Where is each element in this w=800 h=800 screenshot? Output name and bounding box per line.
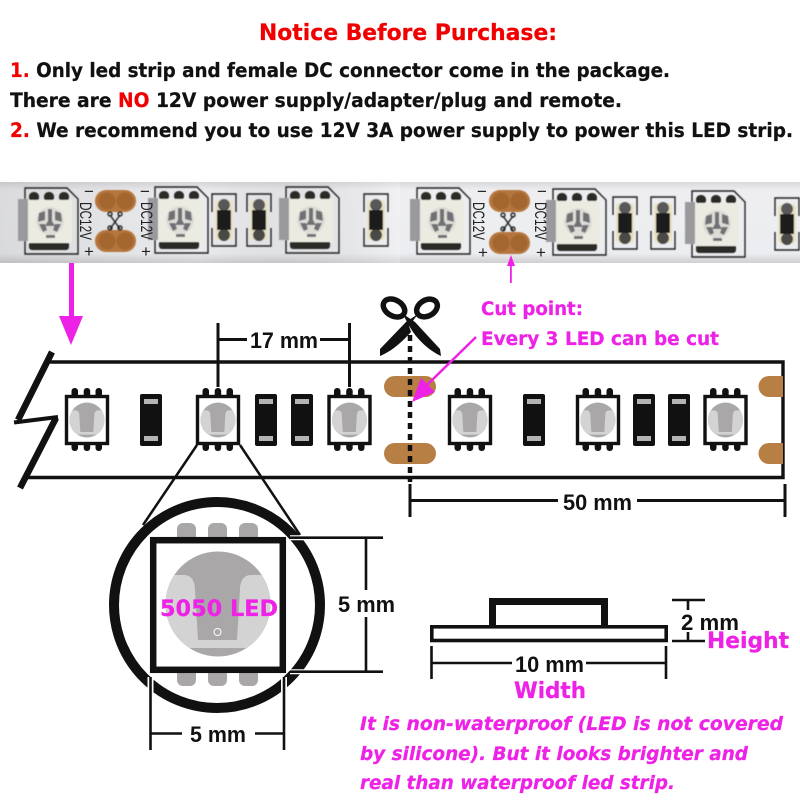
- photo silkscreen labels: DC12V: [76, 202, 95, 240]
- photo resistor 3: [364, 194, 388, 246]
- width label: Width: [514, 678, 586, 704]
- photo cut mark 2: [501, 213, 515, 231]
- funnel lines to enlarged LED: [143, 445, 300, 535]
- LED 5: [578, 388, 618, 451]
- enlarged LED 5050: [114, 502, 320, 708]
- strip diagram: [14, 335, 783, 488]
- 10 mm dimension: 10 mm: [515, 652, 584, 677]
- LED body: [153, 540, 283, 670]
- photo silkscreen labels: DC12V: [531, 202, 550, 240]
- photo silkscreen labels: −: [537, 182, 547, 201]
- photo LED 3: [279, 187, 339, 253]
- photo silkscreen labels: +: [478, 243, 488, 262]
- photo LED 2: [148, 187, 208, 253]
- 5050 LED label: 5050 LED: [160, 597, 278, 622]
- photo silkscreen labels: DC12V: [469, 202, 488, 240]
- magnifier circle: [114, 502, 320, 708]
- cut point callout: [412, 299, 719, 402]
- photo cut mark 1: [108, 212, 122, 230]
- photo silkscreen labels: −: [84, 182, 94, 201]
- notice line 1: 1. Only led strip and female DC connector come in the package.: [10, 59, 670, 82]
- cut line: [408, 335, 412, 482]
- waterproof note: by silicone). But it looks brighter and: [360, 743, 748, 765]
- small pink arrow to photo cut point: [507, 255, 515, 283]
- big pink arrow: [59, 263, 83, 345]
- 50 mm dimension: 50 mm: [563, 490, 632, 515]
- photo LED 4: [410, 188, 470, 254]
- right 5 mm dimension: [290, 538, 395, 672]
- photo pad top 2: [489, 190, 530, 212]
- 50 mm dimension: [410, 484, 785, 517]
- 2 mm dimension: [672, 600, 739, 641]
- strip torn end middle: [14, 417, 58, 422]
- photo LED 6: [685, 191, 745, 257]
- notice line 2: There are NO 12V power supply/adapter/plug and remote.: [10, 89, 622, 112]
- LED pins: [177, 523, 258, 686]
- photo silkscreen labels: −: [477, 182, 487, 201]
- strip torn end: [18, 352, 56, 488]
- 17 mm dimension: [218, 323, 350, 387]
- photo LED 1: [18, 188, 78, 254]
- waterproof note: It is non-waterproof (LED is not covered: [360, 713, 783, 735]
- photo silkscreen labels: +: [141, 242, 151, 261]
- photo pad bottom 1: [95, 230, 136, 252]
- photo silkscreen labels: DC12V: [137, 202, 156, 240]
- resistor 5: [633, 394, 655, 446]
- title: Notice Before Purchase:: [259, 20, 557, 46]
- LED lens: [160, 552, 276, 656]
- resistor 6: [668, 394, 690, 446]
- photo resistor 2: [247, 194, 271, 246]
- resistor 3: [291, 394, 313, 446]
- resistor 4: [523, 394, 545, 446]
- photo silkscreen labels: −: [140, 182, 150, 201]
- 10 mm dimension: [432, 646, 666, 679]
- bottom 5 mm dimension: [150, 677, 284, 750]
- waterproof note: real than waterproof led strip.: [360, 772, 675, 794]
- LED 3: [329, 388, 370, 451]
- 2 mm dimension: 2 mm: [681, 610, 739, 635]
- LED 1: [66, 388, 108, 451]
- cut point callout: Every 3 LED can be cut: [481, 329, 719, 350]
- photo of LED strip: [0, 182, 800, 263]
- photo silkscreen labels: [76, 182, 550, 262]
- cut point arrow: [412, 337, 476, 402]
- cut point callout: Cut point:: [481, 299, 583, 320]
- 17 mm dimension: 17 mm: [250, 328, 318, 353]
- photo pad top 1: [95, 190, 136, 212]
- photo resistor 5: [651, 197, 675, 249]
- photo pad bottom 2: [489, 232, 530, 254]
- waterproof note: [360, 713, 783, 794]
- copper pads: [384, 376, 783, 464]
- photo silkscreen labels: +: [536, 243, 546, 262]
- LED 4: [450, 388, 490, 451]
- photo LED 5: [546, 189, 606, 255]
- photo silkscreen labels: +: [84, 242, 94, 261]
- strip outline: [27, 362, 783, 478]
- side profile: [432, 602, 666, 640]
- LED 2: [198, 388, 238, 451]
- height label: Height: [707, 628, 789, 654]
- resistor 1: [140, 394, 162, 446]
- photo resistor 4: [613, 197, 637, 249]
- right 5 mm dimension: 5 mm: [338, 592, 395, 617]
- resistor 2: [255, 394, 277, 446]
- LED 6: [705, 388, 746, 451]
- scissors icon: [380, 295, 441, 356]
- photo resistor 1: [212, 194, 236, 246]
- bottom 5 mm dimension: 5 mm: [190, 722, 246, 747]
- photo resistor 6: [775, 198, 799, 250]
